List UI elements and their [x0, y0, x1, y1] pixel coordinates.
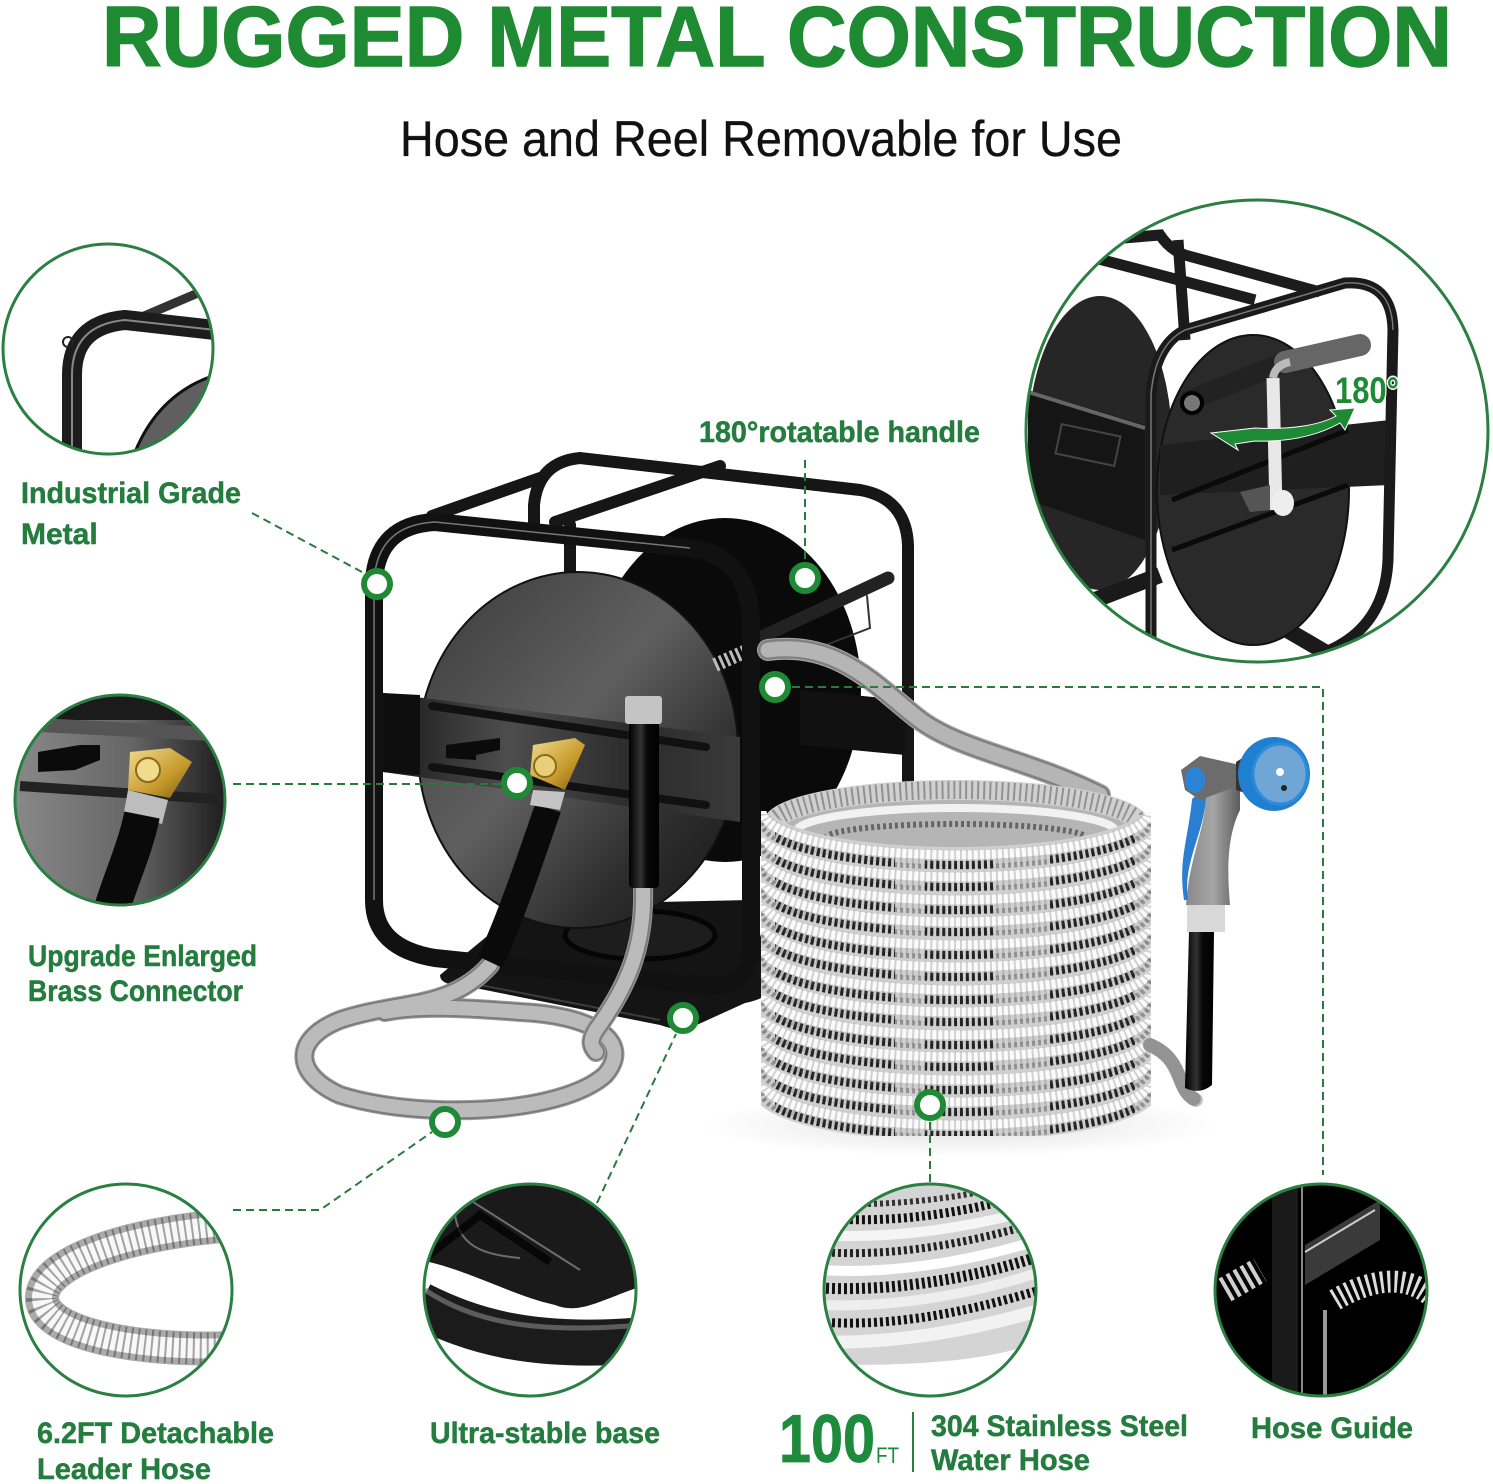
panel: hose guide: [1210, 1180, 1435, 1445]
rear band: [800, 690, 905, 755]
reel rear disc: [589, 518, 861, 862]
leader lines: [233, 460, 1323, 1210]
hose guide bar: [755, 578, 888, 655]
axle handle: [1190, 362, 1285, 400]
panel: brass connector: [10, 690, 257, 1008]
reel rear frame: [432, 458, 908, 790]
main hose from reel: [768, 649, 1100, 795]
black hose sleeve upright: [625, 696, 662, 888]
black hose sleeve from connector: [490, 808, 548, 962]
180 degree label: 180°: [1335, 370, 1399, 411]
product: hose reel and hoses: [304, 458, 1310, 1157]
label: leader hose: 6.2FT Detachable: [37, 1417, 274, 1450]
panel: rotatable handle detail: [699, 195, 1493, 670]
panel: leader hose: [15, 1180, 274, 1484]
panel: ultra-stable base: [420, 1180, 660, 1450]
label: brass connector: Upgrade Enlarged: [28, 940, 257, 973]
rear frame bars: [1095, 235, 1320, 340]
label: 100 ft: 100: [779, 1401, 875, 1477]
leader hose: [304, 888, 643, 1110]
band: [1160, 420, 1390, 495]
panel: stainless steel hose: [779, 1178, 1188, 1477]
divider: [912, 1412, 914, 1472]
front disc: [1157, 335, 1349, 645]
hose axle: [715, 645, 760, 665]
reel bracket band: [383, 693, 740, 822]
reel base: [440, 900, 775, 1029]
label: hose guide: Hose Guide: [1251, 1412, 1413, 1445]
base rails: [1095, 575, 1330, 655]
rotation arrow: [1211, 408, 1355, 450]
label: industrial grade metal: Industrial Grade: [21, 477, 241, 510]
label: 100 ft: FT: [876, 1443, 899, 1468]
rear disc: [1028, 296, 1172, 590]
spray nozzle: [1181, 737, 1310, 1091]
floor shadow: [700, 1093, 1220, 1157]
crank: [1273, 378, 1276, 510]
subtitle: Hose and Reel Removable for Use: [400, 111, 1122, 167]
panel: industrial grade metal: [0, 240, 241, 551]
label: brass connector: Brass Connector: [28, 975, 243, 1008]
tray: [1028, 390, 1145, 540]
hose coil: [762, 785, 1150, 1137]
brass connector: [530, 738, 585, 810]
label: stainless steel: 304 Stainless Steel: [931, 1410, 1188, 1443]
front frame: [1151, 283, 1393, 670]
hose tail to nozzle: [1150, 1045, 1196, 1100]
reel front frame: [374, 522, 751, 986]
label: industrial grade metal: Metal: [21, 518, 98, 551]
marker dots: [364, 565, 943, 1135]
label: rotatable handle: 180°rotatable handle: [699, 416, 980, 449]
label: ultra-stable base: Ultra-stable base: [430, 1417, 660, 1450]
reel front disc: [418, 572, 738, 928]
label: stainless steel: Water Hose: [931, 1444, 1090, 1477]
